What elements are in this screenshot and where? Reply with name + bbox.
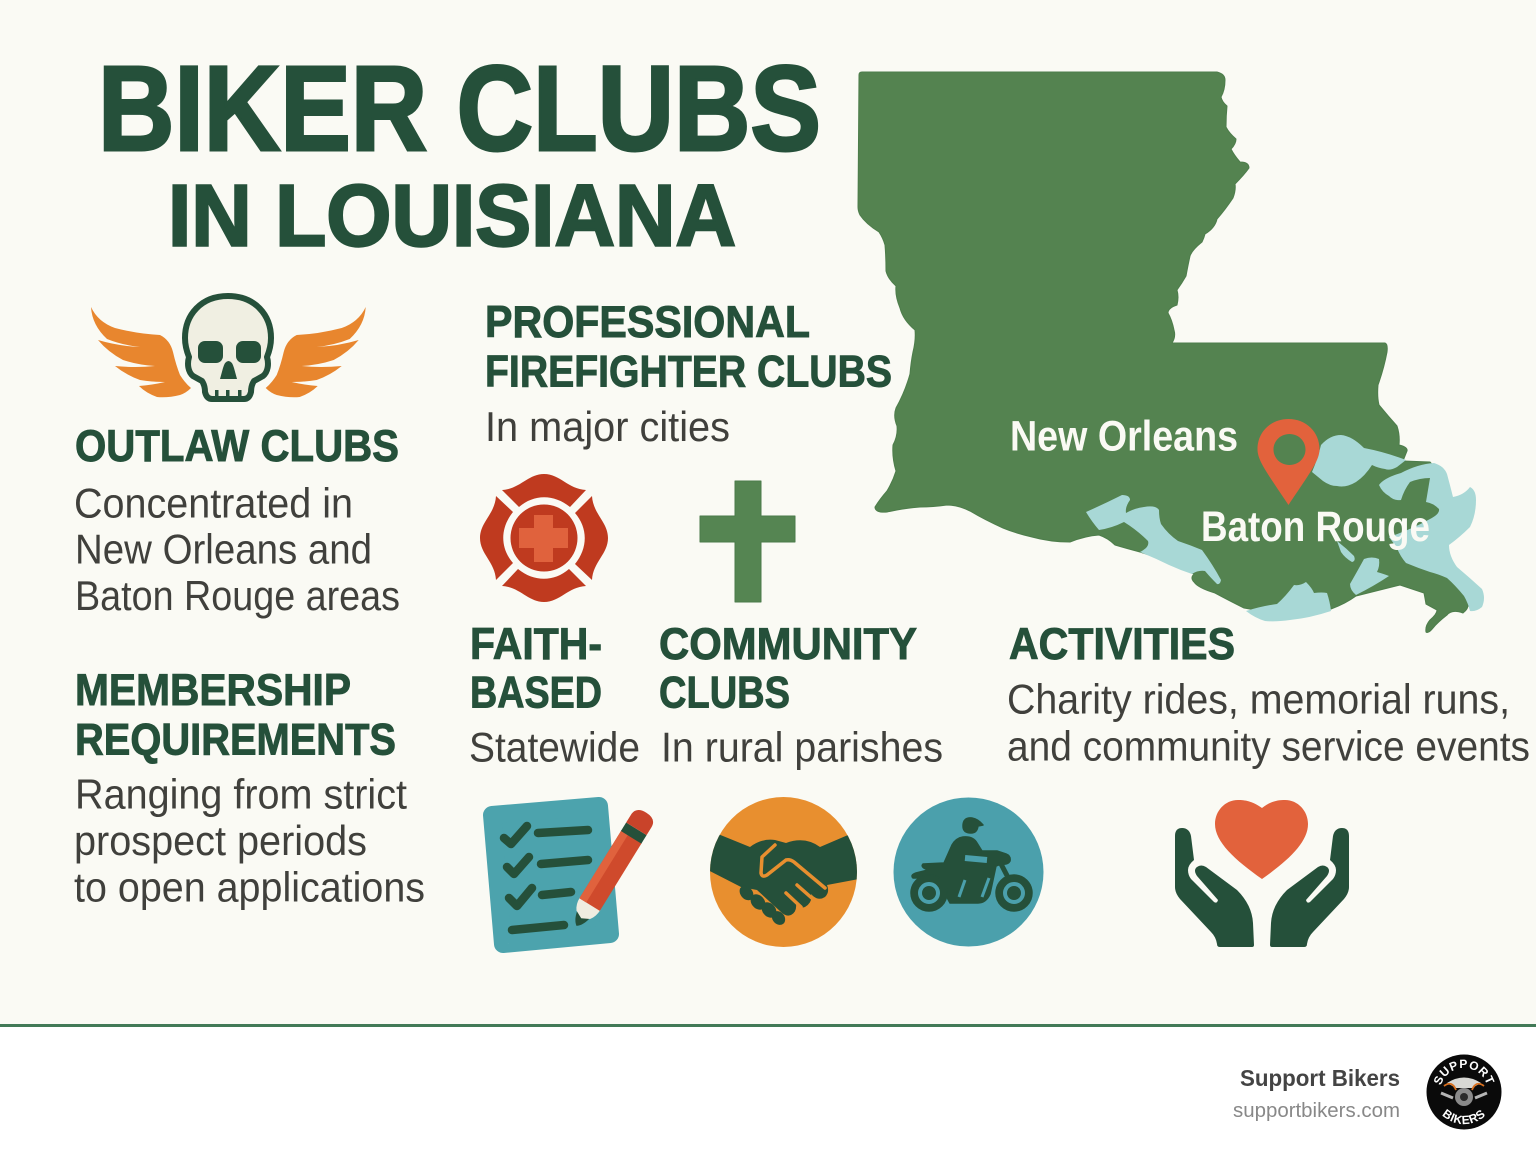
checkmarks and lines — [504, 826, 588, 930]
thumb and finger lines — [761, 845, 825, 907]
body text: prospect periods — [74, 817, 367, 864]
body text: Baton Rouge areas — [75, 572, 400, 619]
panel: faith-based — [469, 620, 640, 770]
heading: FIREFIGHTER CLUBS — [485, 348, 892, 396]
icon: motorcycle rider — [894, 798, 1044, 946]
heading — [470, 620, 602, 718]
title: IN LOUISIANA — [168, 166, 736, 264]
body text — [1007, 676, 1530, 770]
clasped hands — [710, 834, 857, 916]
footer logo badge: BIKERS — [1442, 1109, 1484, 1124]
heading: CLUBS — [659, 668, 790, 718]
right hand — [1270, 828, 1349, 947]
heading: OUTLAW CLUBS — [75, 422, 399, 471]
left hand — [1175, 828, 1254, 947]
title: BIKER CLUBS — [98, 40, 821, 176]
heading — [485, 298, 892, 396]
heading: MEMBERSHIP — [75, 666, 351, 715]
heading: COMMUNITY — [659, 620, 917, 669]
rider and bike — [911, 818, 1032, 911]
city label: Baton Rouge: Baton Rouge — [1201, 503, 1430, 551]
wheels and accents — [920, 858, 1023, 902]
heart — [1215, 800, 1308, 879]
icon: hands holding heart — [1175, 800, 1349, 947]
map of Louisiana — [858, 72, 1484, 632]
body text: In rural parishes — [661, 724, 943, 770]
body text: to open applications — [74, 864, 425, 910]
orange disc — [710, 797, 857, 947]
map pin — [1258, 419, 1320, 505]
skull — [185, 296, 271, 399]
icon: checklist with pencil — [492, 806, 657, 944]
city label: New Orleans: New Orleans — [1010, 412, 1238, 460]
coastal water — [1086, 435, 1484, 621]
icon: faith cross — [700, 481, 795, 602]
icon: winged skull — [91, 296, 366, 400]
footer brand text: Support Bikers — [1240, 1065, 1400, 1091]
heading — [659, 620, 917, 718]
heading: ACTIVITIES — [1009, 620, 1235, 669]
heading: PROFESSIONAL — [485, 298, 810, 347]
heading — [75, 666, 396, 764]
heading: BASED — [470, 668, 602, 718]
panel: community clubs — [659, 620, 943, 770]
panel: professional firefighter clubs — [485, 298, 892, 450]
body text: Concentrated in — [74, 480, 353, 526]
panel: activities — [1007, 620, 1530, 770]
icon: firefighter maltese cross — [480, 474, 608, 602]
skull eyes and nose — [198, 341, 261, 400]
footer logo badge: SUPPORT — [1434, 1060, 1495, 1084]
fingers — [737, 883, 788, 928]
title — [98, 40, 821, 264]
body text: New Orleans and — [75, 526, 372, 572]
clipboard — [492, 806, 610, 944]
body text: Charity rides, memorial runs, — [1007, 676, 1510, 722]
panel: membership requirements — [74, 666, 425, 910]
teal disc — [894, 798, 1044, 946]
heading: REQUIREMENTS — [75, 716, 396, 764]
footer logo badge — [1426, 1054, 1502, 1130]
body text — [74, 770, 425, 910]
panel: outlaw clubs — [74, 422, 400, 619]
right wing — [266, 307, 366, 397]
body text: Statewide — [469, 724, 640, 770]
footer brand text — [1233, 1065, 1400, 1122]
body text: Ranging from strict — [75, 770, 407, 818]
pencil — [566, 806, 657, 932]
body text: In major cities — [485, 403, 730, 450]
left wing — [91, 307, 191, 397]
body text — [74, 480, 400, 619]
footer brand text: supportbikers.com — [1233, 1099, 1400, 1122]
icon: handshake — [710, 797, 857, 947]
land silhouette — [858, 72, 1468, 632]
heading: FAITH- — [470, 620, 602, 669]
footer band — [0, 1024, 1536, 1154]
